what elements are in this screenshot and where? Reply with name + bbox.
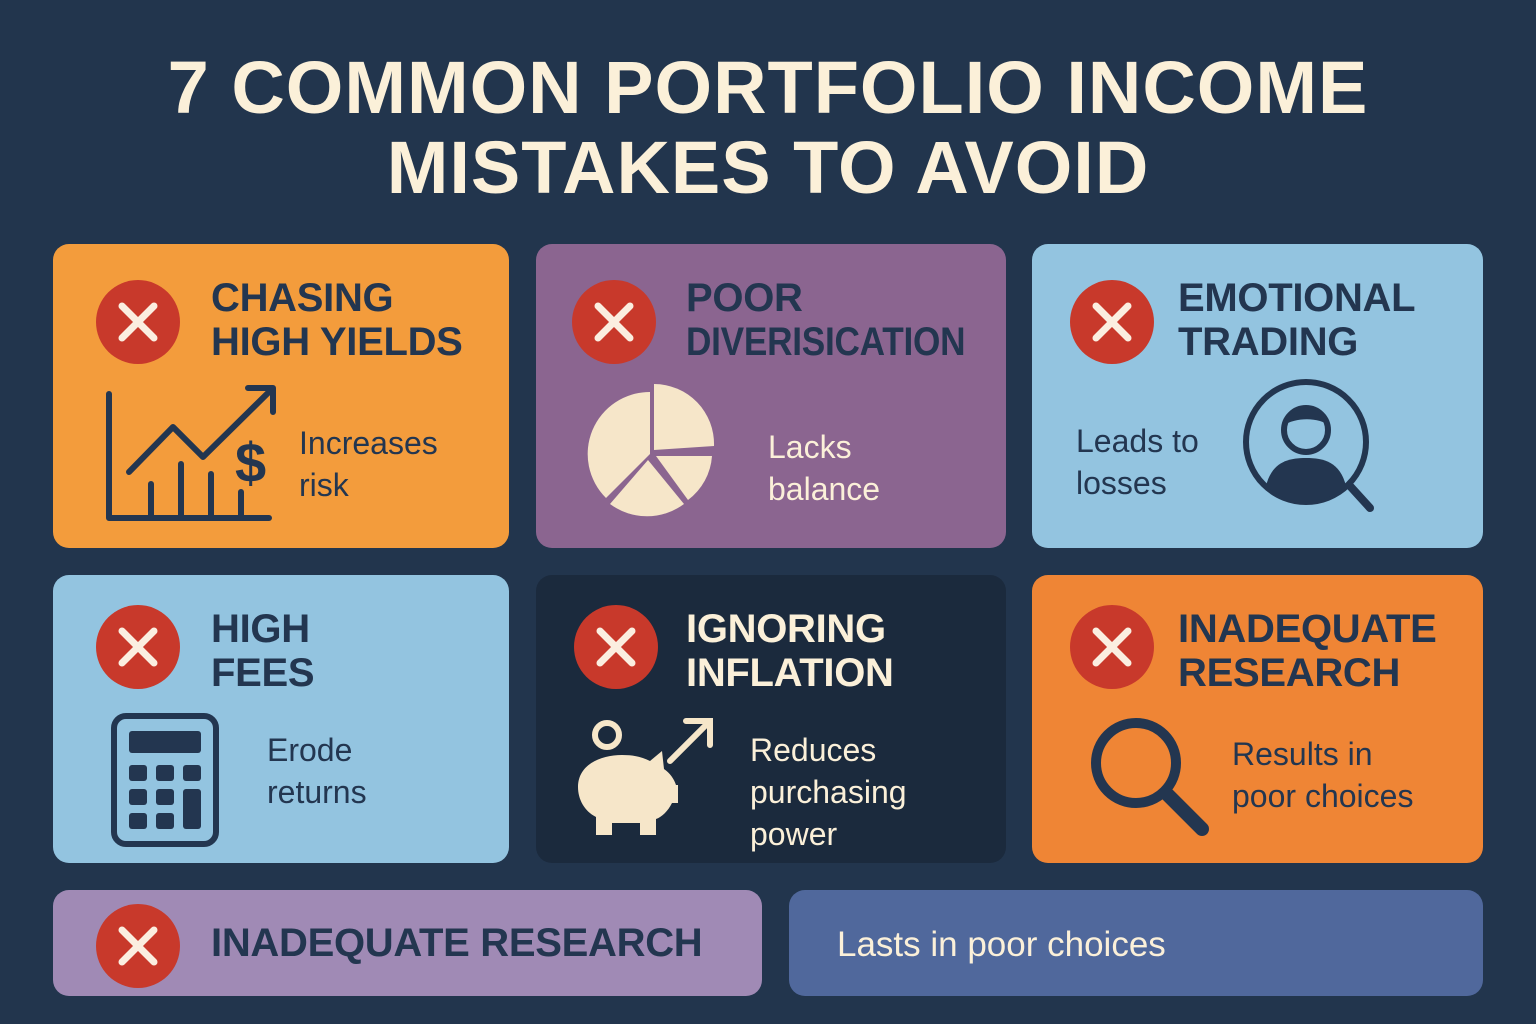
text: Results in: [1232, 736, 1372, 772]
heading: INADEQUATE: [1178, 607, 1436, 651]
heading: CHASING: [211, 276, 393, 320]
icon: x: [96, 904, 180, 988]
icon: chart: $: [235, 431, 266, 494]
panel: high fees: [53, 575, 509, 863]
panel: emotional trading: [1032, 244, 1483, 548]
panel: poor diversification: [536, 244, 1006, 548]
text: returns: [267, 774, 367, 810]
heading: RESEARCH: [1178, 651, 1400, 695]
heading: [686, 276, 965, 364]
heading: HIGH YIELDS: [211, 320, 463, 364]
text: [768, 429, 880, 507]
icon: pie: [588, 384, 714, 516]
icon: chart: [106, 385, 276, 521]
heading: EMOTIONAL: [1178, 276, 1415, 320]
heading: [211, 276, 463, 364]
panel: bottom text bar: [789, 890, 1483, 996]
text: Lasts in poor choices: [837, 925, 1166, 964]
icon: x: [96, 280, 180, 364]
icon: x: [96, 605, 180, 689]
text: Reduces: [750, 732, 876, 768]
icon: x: [574, 605, 658, 689]
text: power: [750, 816, 837, 852]
panel: bottom heading bar: [53, 890, 762, 996]
heading: HIGH: [211, 607, 310, 651]
title: [168, 46, 1368, 209]
text: [1232, 736, 1413, 814]
heading: IGNORING: [686, 607, 886, 651]
text: balance: [768, 471, 880, 507]
heading: [211, 607, 314, 695]
heading: [686, 607, 894, 695]
heading: INFLATION: [686, 651, 894, 695]
icon: calculator: [111, 713, 219, 847]
panel: chasing high yields: [53, 244, 509, 548]
text: losses: [1076, 465, 1167, 501]
title: MISTAKES TO AVOID: [387, 126, 1149, 209]
icon: magnifier: [1091, 718, 1209, 836]
heading: FEES: [211, 651, 314, 695]
text: Increases: [299, 425, 438, 461]
text: risk: [299, 467, 349, 503]
text: poor choices: [1232, 778, 1413, 814]
heading: DIVERISICATION: [686, 320, 965, 364]
heading: INADEQUATE RESEARCH: [211, 921, 702, 965]
text: [750, 732, 907, 852]
panel: ignoring inflation: [536, 575, 1006, 863]
heading: [1178, 276, 1415, 364]
text: [1076, 423, 1199, 501]
icon: x: [1070, 605, 1154, 689]
heading: TRADING: [1178, 320, 1358, 364]
icon: x: [1070, 280, 1154, 364]
text: [267, 732, 367, 810]
text: purchasing: [750, 774, 907, 810]
icon: piggy bank: [578, 718, 713, 835]
title: 7 COMMON PORTFOLIO INCOME: [168, 46, 1368, 129]
text: Leads to: [1076, 423, 1199, 459]
text: Erode: [267, 732, 352, 768]
text: Lacks: [768, 429, 852, 465]
text: [299, 425, 438, 503]
panel: inadequate research: [1032, 575, 1483, 863]
icon: x: [572, 280, 656, 364]
heading: [1178, 607, 1436, 695]
heading: POOR: [686, 276, 803, 320]
icon: person magnifier: [1243, 379, 1374, 512]
